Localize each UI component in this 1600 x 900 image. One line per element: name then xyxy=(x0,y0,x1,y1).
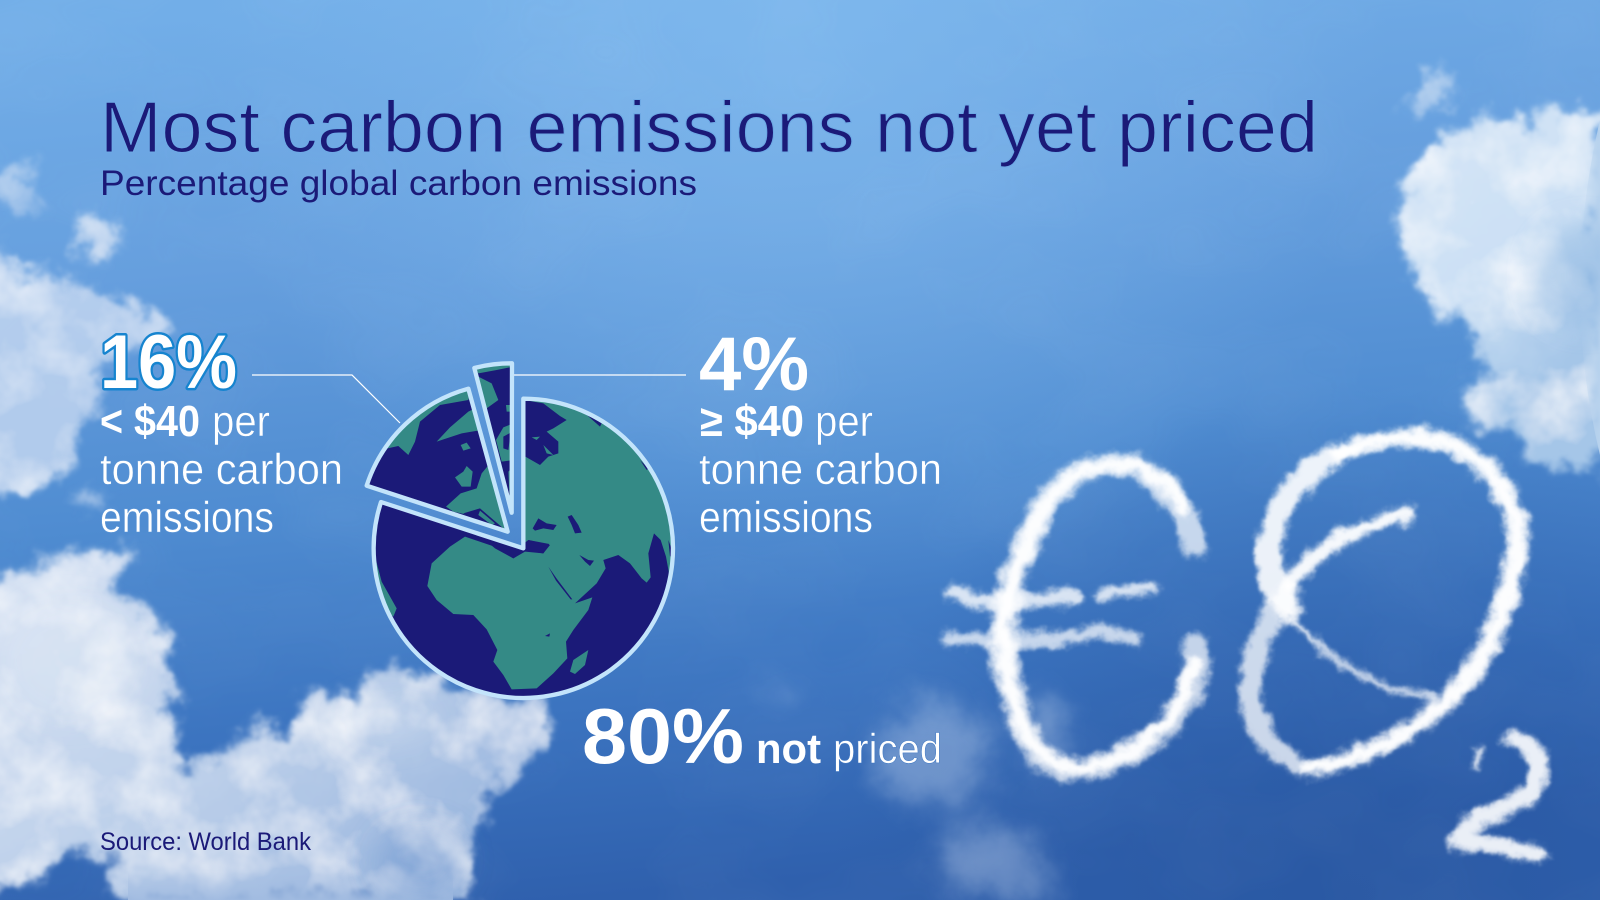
skywriting: subscript 2 xyxy=(1460,738,1539,853)
label: under $40 per tonne carbon emissions: < $40 xyxy=(100,397,200,446)
value: 80%: 80% xyxy=(582,692,744,780)
source: Source: World Bank xyxy=(100,828,311,856)
subtitle: Percentage global carbon emissions xyxy=(100,164,697,203)
cloud shading xyxy=(1535,225,1600,325)
cloud bottom edge xyxy=(128,872,453,900)
wisp xyxy=(1402,70,1470,112)
skywriting: letter O xyxy=(1250,437,1518,768)
cloud: faint clouds below the euro sign xyxy=(768,685,1070,899)
value: 4%: 4% xyxy=(699,322,809,407)
label: at least $40 per tonne carbon emissions: ≥ $40 xyxy=(700,397,804,446)
label: under $40 per tonne carbon emissions: per xyxy=(212,397,270,446)
cloud body xyxy=(1400,105,1600,470)
cloud: upper right xyxy=(1400,70,1600,470)
pie slice: 16% under $40 xyxy=(367,380,513,537)
cloud shading xyxy=(0,600,465,895)
callout: 4% xyxy=(699,322,942,542)
cloud: upper left xyxy=(0,157,173,513)
callout: 80% not priced xyxy=(582,692,942,780)
label: under $40 per tonne carbon emissions: tonne carbon xyxy=(100,445,343,494)
cloud body xyxy=(0,552,552,900)
globe pie chart xyxy=(367,360,683,698)
leader line: 16% xyxy=(252,375,400,423)
cloud: lower left xyxy=(0,552,552,900)
title: Most carbon emissions not yet priced xyxy=(100,88,1318,168)
label: not priced: priced xyxy=(833,725,942,772)
leader line: 4% xyxy=(514,374,686,376)
label: at least $40 per tonne carbon emissions: per xyxy=(815,397,873,446)
pie slice: 80% not priced xyxy=(372,393,683,698)
value: 16%: 16% xyxy=(100,320,237,405)
pie slice: 4% at least $40 xyxy=(472,360,513,513)
label: at least $40 per tonne carbon emissions: tonne carbon xyxy=(699,445,942,494)
skywriting: euro CO2 xyxy=(950,437,1539,853)
skywriting: euro sign xyxy=(950,464,1196,770)
label: at least $40 per tonne carbon emissions: emissions xyxy=(699,493,873,542)
cloud right edge xyxy=(1580,120,1600,455)
callout: 16% xyxy=(100,320,343,542)
label: not priced: not xyxy=(756,725,821,772)
label: under $40 per tonne carbon emissions: emissions xyxy=(100,493,274,542)
